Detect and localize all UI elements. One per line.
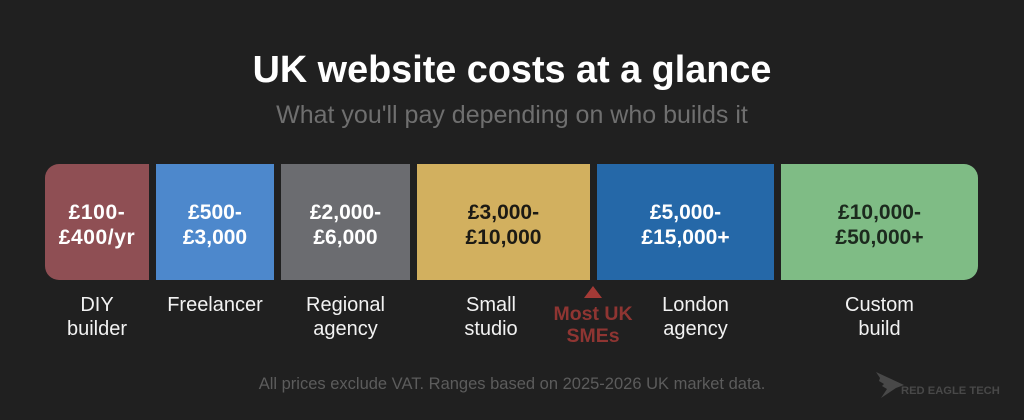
segment: DIY builder [45, 164, 149, 280]
segment: Small studio [417, 164, 590, 280]
label: Custom build: Custom [845, 294, 914, 316]
icon: eagle [876, 372, 904, 398]
label: London agency: London [662, 294, 729, 316]
label: Small studio: studio [464, 318, 518, 340]
segment: Freelancer: £500- [188, 200, 242, 224]
segment: DIY builder: £400/yr [59, 226, 135, 248]
segment: London agency: £15,000+ [641, 226, 730, 248]
segment: London agency [597, 164, 774, 280]
subtitle: What you'll pay depending on who builds it [276, 101, 748, 129]
label: Freelancer: Freelancer [167, 294, 263, 316]
label: Small studio [464, 294, 518, 340]
label: Custom build: build [858, 318, 901, 340]
segment: Small studio: £10,000 [466, 226, 541, 248]
segment: Regional agency [281, 164, 410, 280]
segment: Custom build: £10,000- [838, 200, 921, 224]
icon: callout triangle [584, 286, 602, 298]
segment: Custom build: £50,000+ [835, 226, 924, 248]
callout: Most UK SMEs [553, 286, 633, 347]
callout text: Most UK [553, 303, 633, 325]
title: UK website costs at a glance [253, 49, 771, 91]
segment: Freelancer [156, 164, 274, 280]
label: Small studio: Small [466, 294, 516, 316]
segment: London agency: £5,000- [650, 200, 721, 224]
segment: Freelancer: £3,000 [183, 226, 247, 248]
label: Regional agency: agency [313, 318, 378, 340]
segment: Small studio: £3,000- [468, 200, 539, 224]
segment: Regional agency: £6,000 [313, 226, 378, 248]
label: DIY builder [67, 294, 127, 340]
price bar [45, 164, 978, 280]
label: Custom build [845, 294, 914, 340]
label: DIY builder: DIY [80, 294, 114, 316]
label: Regional agency [306, 294, 385, 340]
label: London agency [662, 294, 729, 340]
label: London agency: agency [663, 318, 728, 340]
footnote: All prices exclude VAT. Ranges based on 2025-2026 UK market data. [259, 375, 765, 393]
label: DIY builder: builder [67, 318, 127, 340]
segment: DIY builder: £100- [69, 200, 125, 224]
segment: Custom build [781, 164, 978, 280]
logo: Red Eagle Tech [876, 372, 1000, 398]
label: Regional agency: Regional [306, 294, 385, 316]
segment: Regional agency: £2,000- [310, 200, 381, 224]
callout text: SMEs [566, 325, 620, 347]
logo text: RED EAGLE TECH [901, 385, 1000, 397]
callout text [553, 303, 633, 347]
